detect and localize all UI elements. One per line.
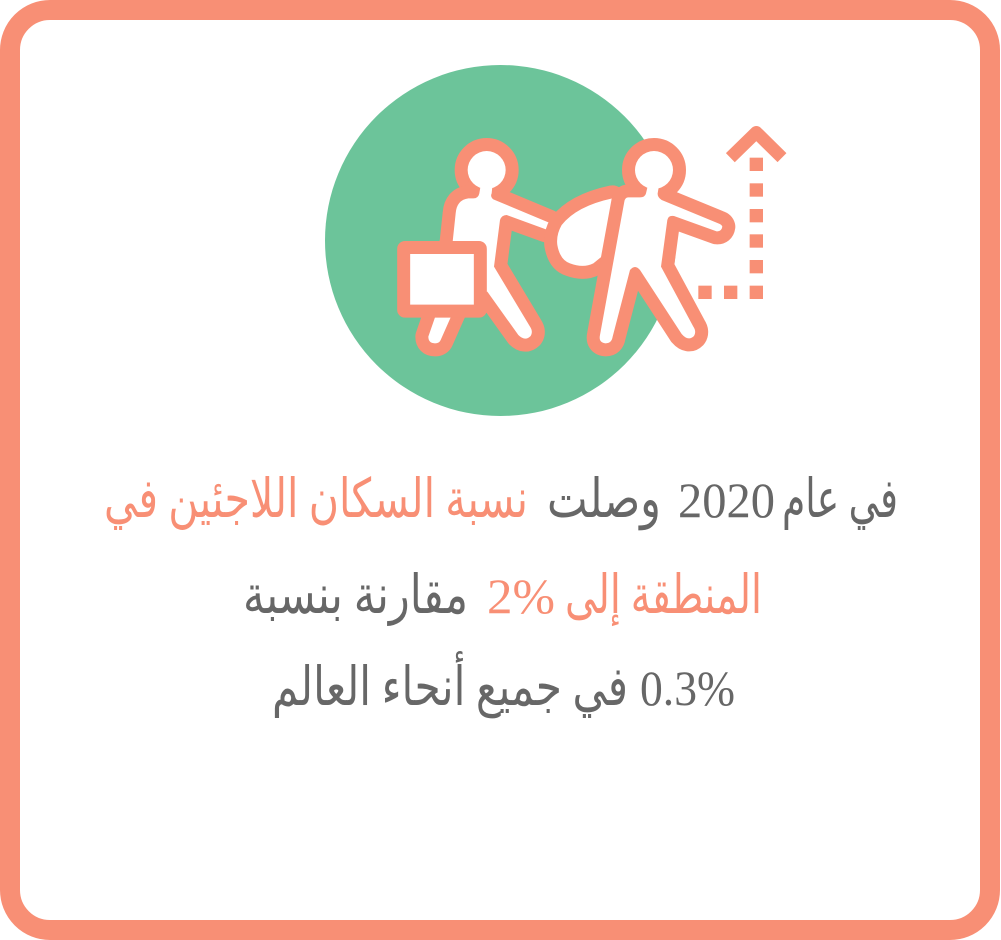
text: statement line 2: المنطقة إلى [565, 565, 762, 626]
icon: refugees carrying luggage [404, 132, 782, 343]
text: statement line 2: 2% [487, 568, 555, 624]
text: statement line 2 [243, 565, 762, 626]
icon: suitcase [404, 247, 480, 311]
text: statement line 3: في جميع أنحاء العالم [272, 651, 628, 719]
text: statement line 1: وصلت [547, 469, 661, 530]
text: statement line 2: مقارنة بنسبة [243, 565, 468, 626]
text: statement line 3: 0.3% [640, 660, 735, 716]
figure: left person with suitcase [428, 151, 549, 343]
text: statement line 1: 2020 [678, 472, 775, 528]
icon: sack [557, 198, 612, 266]
arrow: dotted upward path [698, 132, 782, 299]
text: statement line 1: نسبة السكان اللاجئين في [104, 469, 528, 530]
green circle background [325, 65, 676, 416]
figure: right person [600, 151, 722, 343]
text: statement line 1 [104, 469, 898, 530]
text: statement line 1: في عام [782, 469, 898, 530]
